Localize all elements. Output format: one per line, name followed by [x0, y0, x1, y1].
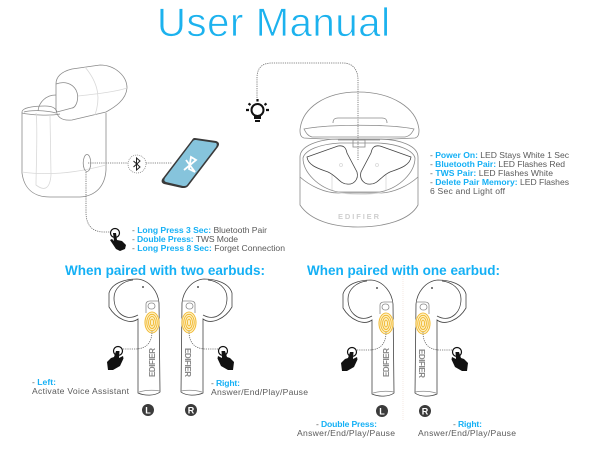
text: right action: - Right: — [211, 378, 240, 388]
badge: L: L — [145, 406, 151, 416]
case logo: EDIFIER — [338, 212, 380, 221]
text: LED status: - Power On: LED Stays White 1 Sec — [430, 150, 570, 160]
connector: case button to hand — [86, 172, 111, 232]
text: double press action: - Double Press: — [316, 419, 377, 429]
illustration: left earbud, two-bud mode — [107, 279, 160, 395]
illustration: open charging case front view — [300, 92, 419, 227]
illustration: left earbud, one-bud mode — [341, 280, 394, 396]
text: button instructions: - Long Press 3 Sec: Bluetooth Pair — [132, 225, 267, 235]
text: LED status: - Delete Pair Memory: LED Flashes — [430, 177, 569, 187]
connector: case button to phone — [88, 162, 172, 164]
text: right action, one-bud mode: - Right: — [453, 419, 482, 429]
illustration: left earbud, two-bud mode: EDIFIER — [148, 348, 157, 377]
text: button instructions: - Double Press: TWS Mode — [132, 234, 238, 244]
text: right action — [211, 378, 308, 397]
badge: L — [142, 404, 154, 416]
icon: bluetooth badge — [128, 155, 146, 173]
illustration: left earbud, one-bud mode: EDIFIER — [382, 348, 391, 377]
text: LED status: - TWS Pair: LED Flashes White — [430, 168, 553, 178]
illustration: open charging case side view — [22, 65, 127, 197]
badge: R: R — [422, 406, 429, 416]
text: right action, one-bud mode — [418, 419, 516, 438]
text: LED status — [430, 150, 570, 196]
badge: R — [419, 405, 431, 417]
heading: two earbuds: When paired with two earbuds: — [65, 263, 265, 278]
badge: R: R — [188, 406, 195, 416]
text: LED status: 6 Sec and Light off — [430, 186, 506, 196]
illustration: right earbud, two-bud mode — [181, 279, 234, 395]
text: LED status: - Bluetooth Pair: LED Flashes Red — [430, 159, 565, 169]
badge: L — [376, 405, 388, 417]
text: button instructions — [132, 225, 285, 253]
text: left action: - Left: — [32, 377, 56, 387]
text: right action: Answer/End/Play/Pause — [211, 387, 308, 397]
text: right action, one-bud mode: Answer/End/Play/Pause — [418, 428, 516, 438]
icon: pressing hand — [110, 228, 126, 251]
badge: L: L — [379, 406, 385, 416]
text: button instructions: - Long Press 8 Sec: Forget Connection — [132, 243, 285, 253]
connector: LED to light bulb — [257, 63, 358, 160]
illustration: right earbud, one-bud mode — [415, 280, 468, 396]
text: left action — [32, 377, 130, 396]
text: double press action — [297, 419, 395, 438]
icon: smartphone — [162, 138, 219, 188]
text: left action: Activate Voice Assistant — [32, 386, 130, 396]
title: User Manual — [157, 1, 390, 45]
illustration: right earbud, two-bud mode: EDIFIER — [183, 348, 192, 377]
text: double press action: Answer/End/Play/Pause — [297, 428, 395, 438]
illustration: right earbud, one-bud mode: EDIFIER — [417, 349, 426, 378]
icon: light bulb — [246, 99, 269, 122]
badge: R — [185, 404, 197, 416]
heading: one earbud: When paired with one earbud: — [307, 263, 500, 278]
